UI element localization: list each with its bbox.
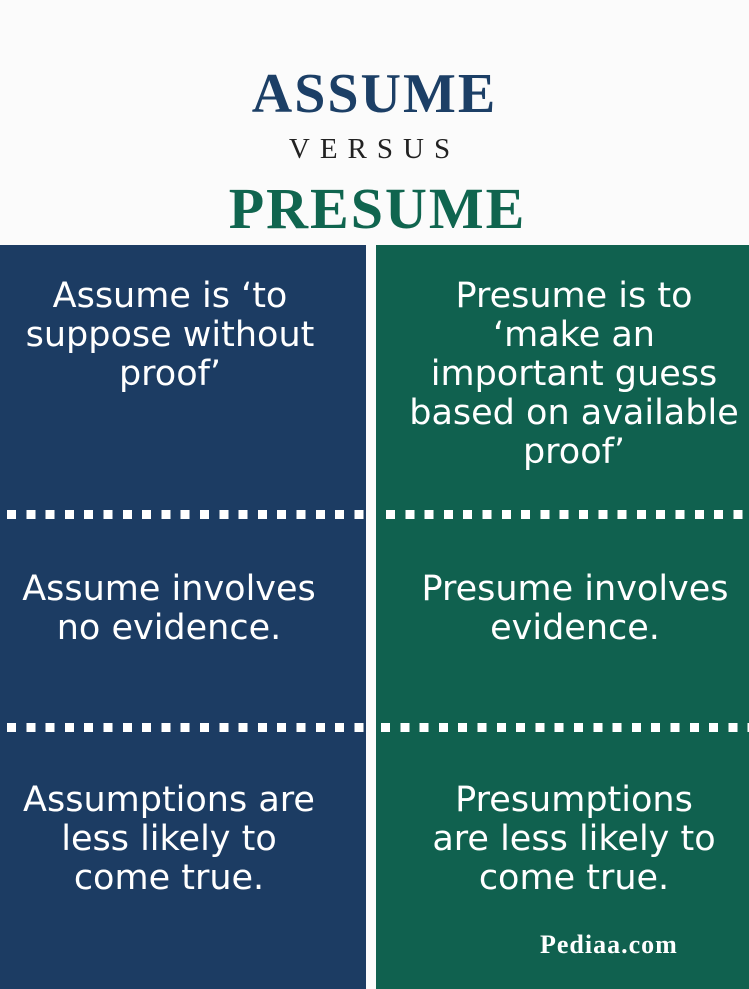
text: definition assume: Assume is ‘to <box>53 276 287 316</box>
text: definition assume <box>26 276 314 394</box>
text: likelihood presume <box>432 780 716 898</box>
text: likelihood presume: are less likely to <box>432 819 716 859</box>
text: definition assume: suppose without <box>26 315 314 355</box>
panel: presume <box>376 245 749 989</box>
text: evidence assume <box>22 569 316 648</box>
text: definition presume <box>409 276 739 472</box>
divider dots <box>386 510 749 519</box>
text: evidence presume <box>421 569 729 648</box>
text: likelihood presume: come true. <box>479 858 669 898</box>
text: definition presume: proof’ <box>523 432 625 472</box>
divider dots <box>7 723 366 732</box>
text: likelihood presume: Presumptions <box>455 780 693 820</box>
text: likelihood assume <box>23 780 315 898</box>
text: definition presume: ‘make an <box>493 315 655 355</box>
title: assume: ASSUME <box>252 63 497 125</box>
divider dots <box>381 723 749 732</box>
text: definition assume: proof’ <box>119 354 221 394</box>
text: likelihood assume: come true. <box>74 858 264 898</box>
text: evidence presume: Presume involves <box>421 569 729 609</box>
text: likelihood assume: Assumptions are <box>23 780 315 820</box>
title: presume: PRESUME <box>229 176 526 241</box>
text: evidence assume: no evidence. <box>57 608 281 648</box>
text: definition presume: important guess <box>431 354 717 394</box>
panel: assume <box>0 245 366 989</box>
divider dots <box>7 510 366 519</box>
text: definition presume: based on available <box>409 393 739 433</box>
logo: pediaa.com: Pediaa.com <box>540 930 678 959</box>
text: definition presume: Presume is to <box>455 276 693 316</box>
text: likelihood assume: less likely to <box>61 819 277 859</box>
text: evidence assume: Assume involves <box>22 569 316 609</box>
subtitle: versus: VERSUS <box>289 133 460 165</box>
text: evidence presume: evidence. <box>490 608 660 648</box>
